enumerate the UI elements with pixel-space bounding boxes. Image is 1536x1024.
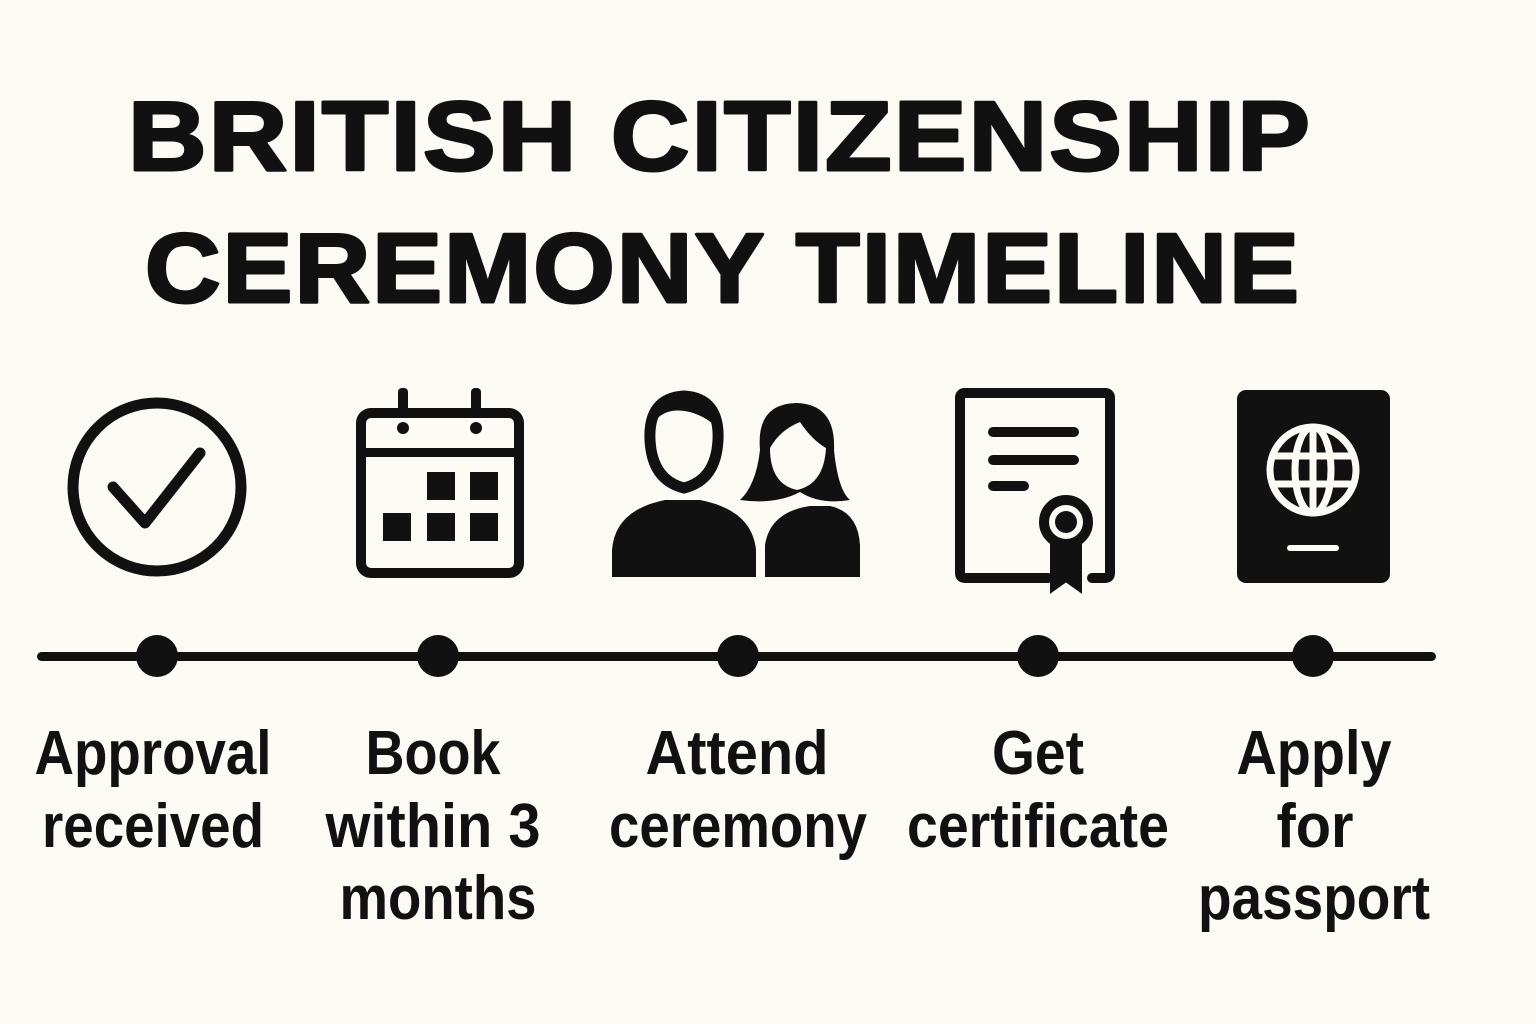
label: get certificate: certificate [907, 792, 1169, 861]
label: attend ceremony: Attend [646, 719, 828, 788]
icon: people [612, 396, 860, 577]
label: approval received [34, 719, 272, 861]
label: get certificate: Get [992, 719, 1084, 788]
icon: passport [1237, 390, 1390, 583]
label: apply for passport: Apply [1236, 719, 1392, 788]
label: get certificate [907, 719, 1169, 861]
title: BRITISH CITIZENSHIP [128, 81, 1312, 191]
icon: certificate [960, 393, 1110, 590]
icon: calendar [361, 388, 519, 573]
title: CEREMONY TIMELINE [145, 213, 1301, 323]
title [128, 81, 1312, 323]
timeline [37, 635, 1436, 677]
label: approval received: received [42, 792, 264, 861]
label: book within 3 months: Book [366, 719, 501, 788]
label: book within 3 months: within 3 [325, 792, 540, 861]
label: attend ceremony: ceremony [609, 792, 867, 861]
label: book within 3 months: months [340, 864, 536, 933]
icon: check circle [73, 403, 241, 571]
label: book within 3 months [325, 719, 540, 933]
label: approval received: Approval [34, 719, 272, 788]
label: apply for passport: passport [1198, 864, 1430, 933]
label: apply for passport [1198, 719, 1430, 933]
label: attend ceremony [609, 719, 867, 861]
label: apply for passport: for [1276, 792, 1354, 861]
